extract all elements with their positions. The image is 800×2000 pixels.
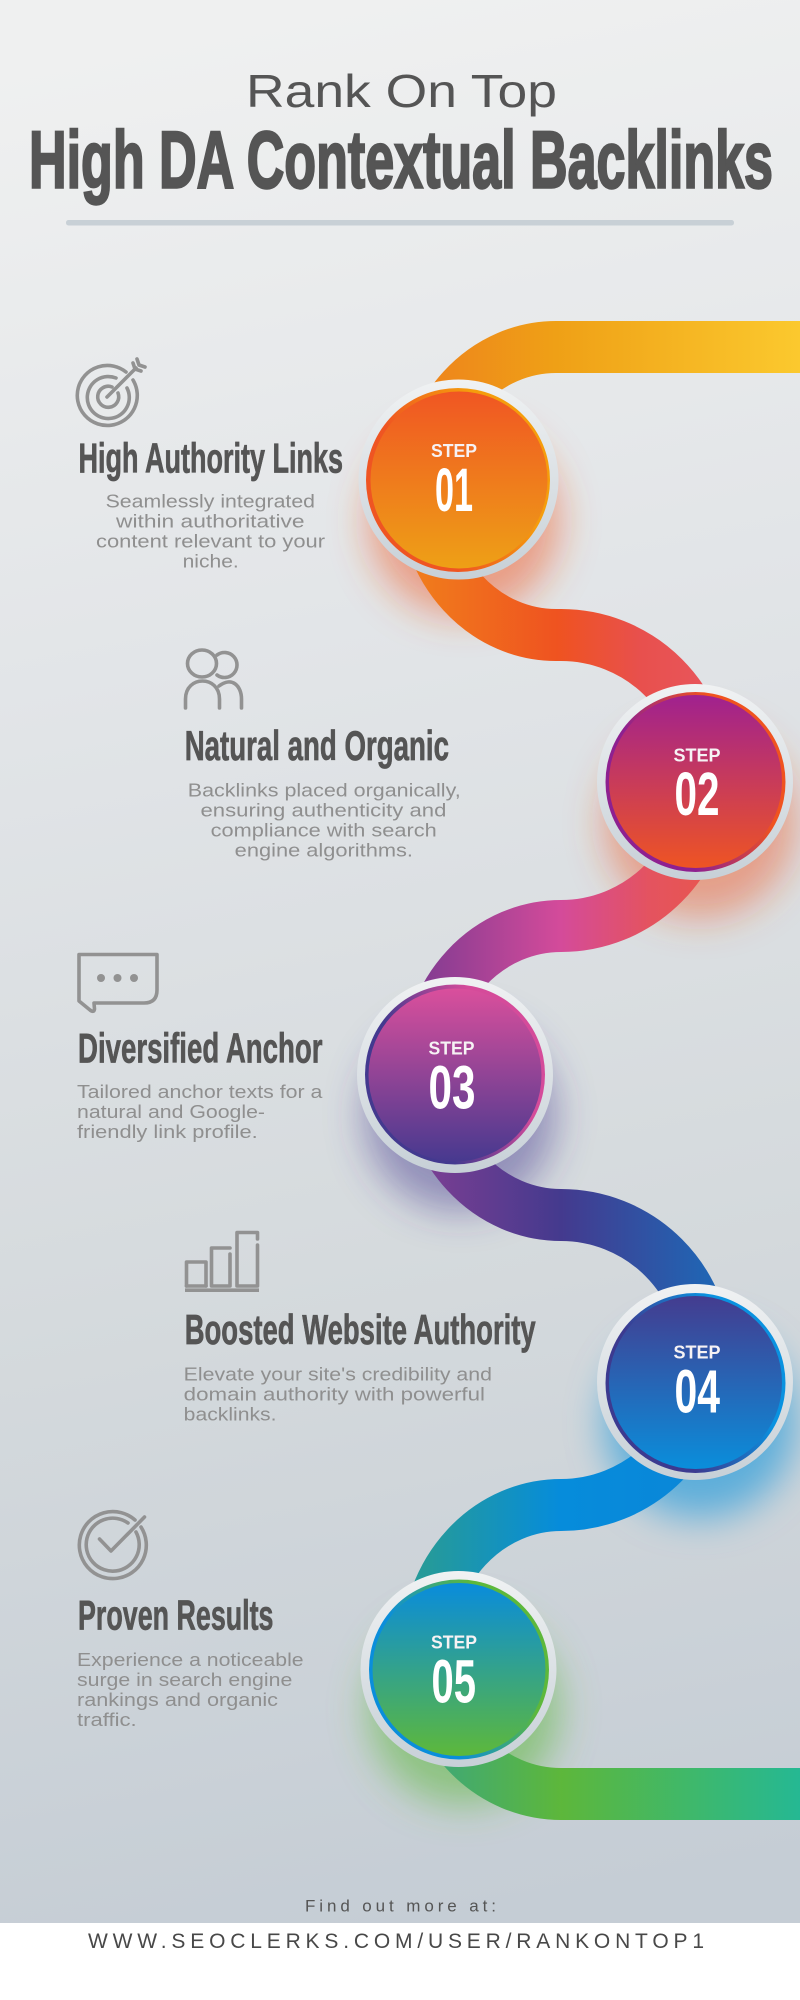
step 02 circle: STEP [674, 746, 720, 766]
text: step 3 description: Tailored anchor texts for a [77, 1081, 323, 1102]
step 02 circle: 02 [674, 760, 720, 828]
text: step 4 description: backlinks. [184, 1404, 276, 1424]
text: step 5 description: traffic. [77, 1709, 137, 1730]
step 01 circle: 01 [435, 456, 473, 524]
text: step 5 description: surge in search engine [77, 1669, 292, 1690]
text: step 5 description: Experience a noticeable [77, 1649, 304, 1670]
step 01 circle [358, 380, 558, 580]
icon: bar chart [185, 1232, 259, 1290]
heading: Boosted Website Authority: Boosted Website Authority [185, 1306, 536, 1353]
footer label: Find out more at: [305, 1896, 496, 1916]
icon: two people [186, 650, 242, 708]
title divider [66, 220, 734, 226]
glow shadows behind step circles [364, 424, 796, 1805]
text: step 3 description: friendly link profile. [77, 1121, 258, 1142]
text: step 2 description: Backlinks placed organically, [188, 780, 461, 800]
step 02 circle [597, 684, 793, 880]
text: step 5 description [77, 1649, 304, 1730]
step 04 circle [597, 1284, 793, 1480]
text: step 1 description: Seamlessly integrated [106, 490, 315, 512]
step 04 circle: STEP [674, 1342, 720, 1362]
footer white band [0, 1923, 800, 2000]
title: Rank On Top: Rank On Top [246, 65, 557, 117]
icon: speech bubble [79, 954, 157, 1011]
step 03 circle: STEP [428, 1038, 474, 1058]
heading: Diversified Anchor: Diversified Anchor [78, 1024, 322, 1072]
text: step 4 description: Elevate your site's credibility and [184, 1364, 492, 1384]
text: step 3 description [77, 1081, 323, 1142]
winding ribbon path [424, 347, 800, 1794]
text: step 1 description: niche. [183, 550, 239, 572]
text: step 2 description: compliance with search [211, 820, 437, 840]
step 05 circle: 05 [432, 1648, 476, 1716]
text: step 4 description: domain authority with powerful [184, 1384, 485, 1404]
step 01 circle: STEP [431, 441, 477, 461]
text: step 2 description: engine algorithms. [235, 840, 413, 860]
text: step 4 description [184, 1364, 492, 1424]
footer url: WWW.SEOCLERKS.COM/USER/RANKONTOP1 [88, 1930, 704, 1953]
icon: target with arrow [77, 359, 145, 425]
text: step 2 description [188, 780, 461, 860]
heading: Natural and Organic: Natural and Organic [185, 722, 449, 769]
step 03 circle: 03 [428, 1054, 476, 1122]
text: step 2 description: ensuring authenticity and [200, 800, 446, 820]
text: step 1 description [96, 490, 325, 572]
step 05 circle: STEP [431, 1632, 477, 1652]
heading: Proven Results: Proven Results [78, 1592, 274, 1638]
heading: High Authority Links: High Authority Links [78, 434, 343, 482]
text: step 5 description: rankings and organic [77, 1689, 278, 1710]
step 05 circle [360, 1571, 556, 1767]
step 04 circle: 04 [674, 1358, 720, 1426]
step 03 circle [357, 977, 553, 1173]
text: step 3 description: natural and Google- [77, 1101, 265, 1122]
text: step 1 description: within authoritative [115, 510, 305, 532]
icon: check mark in circle [79, 1512, 146, 1579]
text: step 1 description: content relevant to your [96, 530, 325, 552]
